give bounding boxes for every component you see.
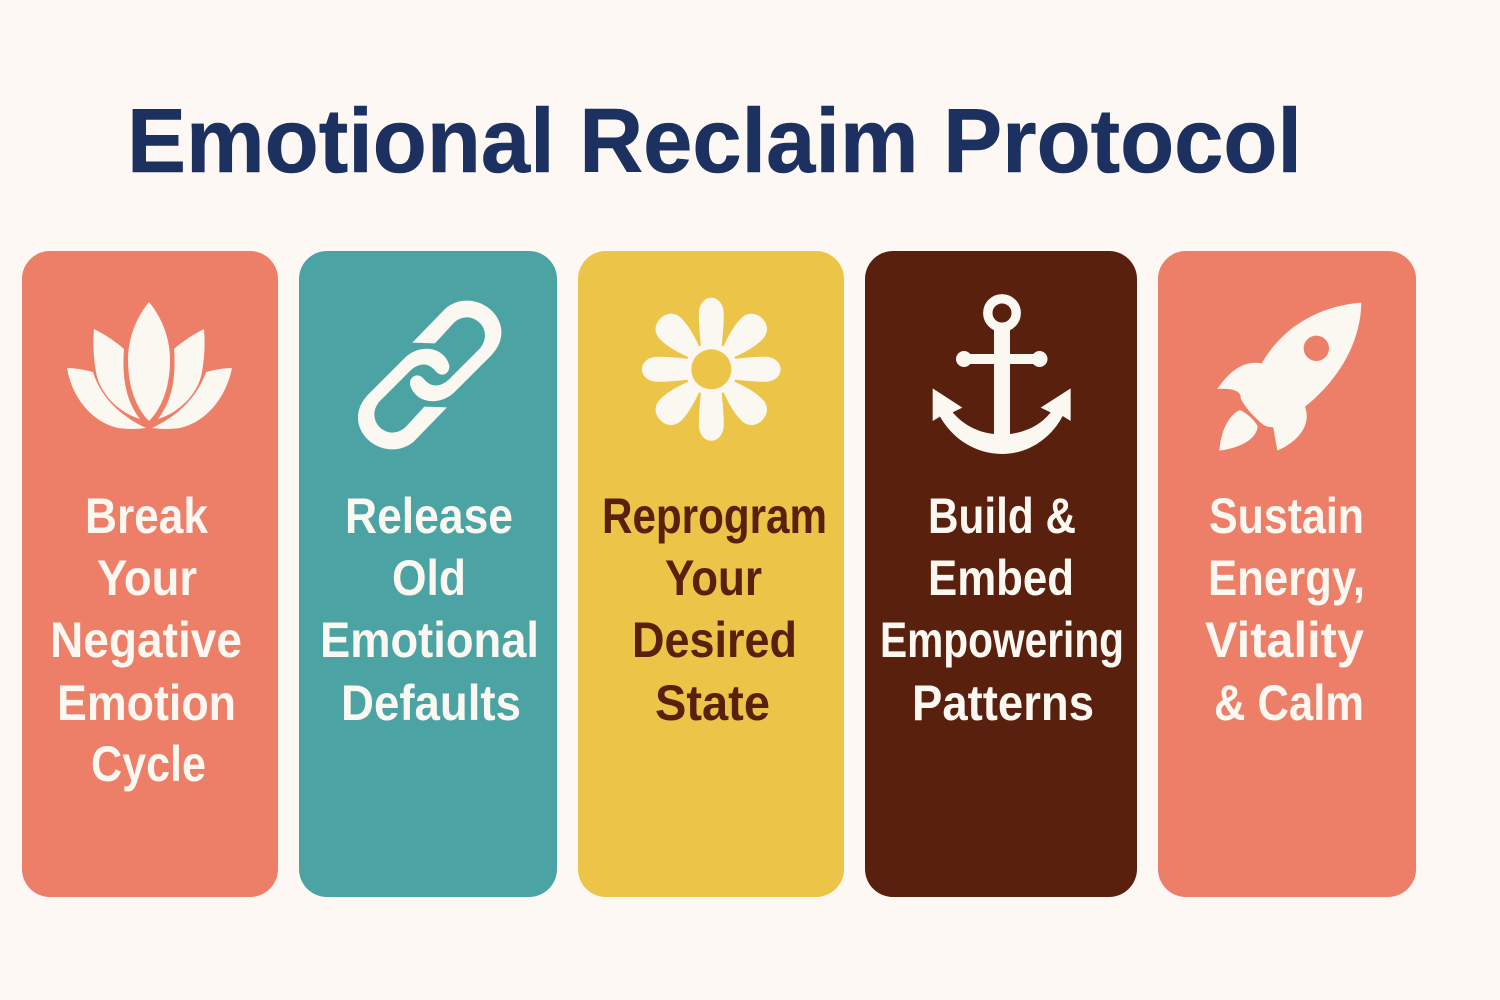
- panel text: & Calm: [1214, 675, 1364, 731]
- panel text: Emotional: [320, 612, 539, 668]
- panel text: Vitality: [1205, 612, 1364, 668]
- panel text: Patterns: [912, 675, 1094, 731]
- panel text: [1205, 488, 1365, 731]
- panel text: Empowering: [880, 612, 1124, 668]
- panel text: Your: [97, 550, 197, 606]
- panel: reprogram desired state: [578, 251, 844, 897]
- panel: sustain energy vitality calm: [1158, 251, 1416, 897]
- panel text: Energy,: [1208, 550, 1365, 606]
- icon: flower: [642, 298, 781, 441]
- panel text: State: [655, 675, 770, 731]
- panel text: [50, 488, 242, 792]
- panel text: Build &: [928, 488, 1076, 544]
- panel text: [880, 488, 1124, 731]
- panel text: Reprogram: [602, 488, 827, 544]
- icon: rocket: [1217, 303, 1361, 451]
- panel text: Old: [392, 550, 466, 606]
- panel text: Desired: [632, 612, 797, 668]
- icon: anchor: [933, 299, 1071, 454]
- panel text: Cycle: [91, 736, 206, 792]
- panel text: Negative: [50, 612, 242, 668]
- panel text: Emotion: [57, 675, 236, 731]
- panel text: Your: [665, 550, 762, 606]
- title: Emotional Reclaim Protocol: [127, 91, 1302, 192]
- icon: chain link: [358, 301, 501, 449]
- panel: build and embed patterns: [865, 251, 1137, 897]
- panel: break negative emotion cycle: [22, 251, 278, 897]
- panel text: [320, 488, 539, 731]
- panel text: Release: [345, 488, 513, 544]
- icon: lotus: [67, 302, 232, 429]
- panel text: [602, 488, 827, 731]
- panel text: Embed: [928, 550, 1074, 606]
- panel text: Break: [85, 488, 208, 544]
- panel: release old defaults: [299, 251, 557, 897]
- panel text: Sustain: [1209, 488, 1364, 544]
- panel text: Defaults: [341, 675, 521, 731]
